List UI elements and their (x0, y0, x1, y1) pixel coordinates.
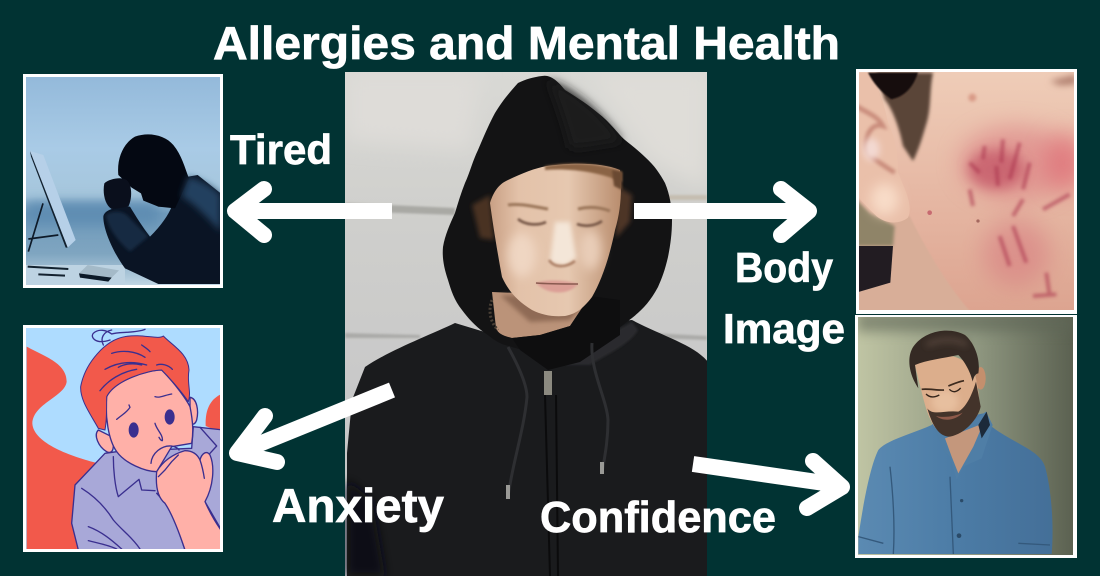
rash (960, 126, 1073, 199)
silhouette: torso and arm (103, 175, 221, 284)
silhouette: fist (104, 178, 131, 209)
shirt (858, 413, 1053, 554)
arrow: to confidence (693, 461, 842, 508)
label: Confidence: Confidence (540, 493, 776, 542)
collar (565, 322, 638, 365)
arrow: to tired (235, 189, 392, 235)
illustration: anxious person (23, 325, 223, 552)
hoodie strings and zipper (508, 347, 527, 497)
ears (96, 430, 113, 452)
shirt (72, 427, 223, 550)
title: Allergies and Mental Health (213, 17, 840, 69)
hair (876, 73, 933, 161)
arrow: to anxiety (237, 390, 392, 462)
arrow: to body image (634, 189, 809, 235)
silhouette: head (118, 134, 189, 208)
hoodie body (347, 320, 708, 576)
hood (443, 76, 672, 355)
facial features (129, 422, 139, 438)
right-top eye corner (1050, 74, 1076, 85)
label: Body Image: Image (723, 305, 845, 352)
face (472, 164, 632, 316)
photo: man looking down (855, 312, 1077, 558)
center photo: hooded boy (345, 72, 708, 576)
label: Body Image (723, 244, 845, 352)
face (106, 370, 193, 472)
hair (81, 336, 190, 430)
label: Body Image: Body (735, 244, 834, 291)
neck (492, 292, 590, 338)
beard (927, 382, 981, 437)
photo: tired man at computer (23, 74, 223, 288)
photo: skin rash on cheek (856, 69, 1086, 316)
neck and lower-left (859, 216, 968, 310)
hand (156, 451, 223, 550)
hair (909, 331, 979, 388)
label: Anxiety: Anxiety (272, 479, 444, 532)
ear and face (976, 367, 986, 390)
label: Tired: Tired (230, 126, 332, 173)
collar and neck (984, 412, 993, 427)
ear (856, 73, 910, 222)
